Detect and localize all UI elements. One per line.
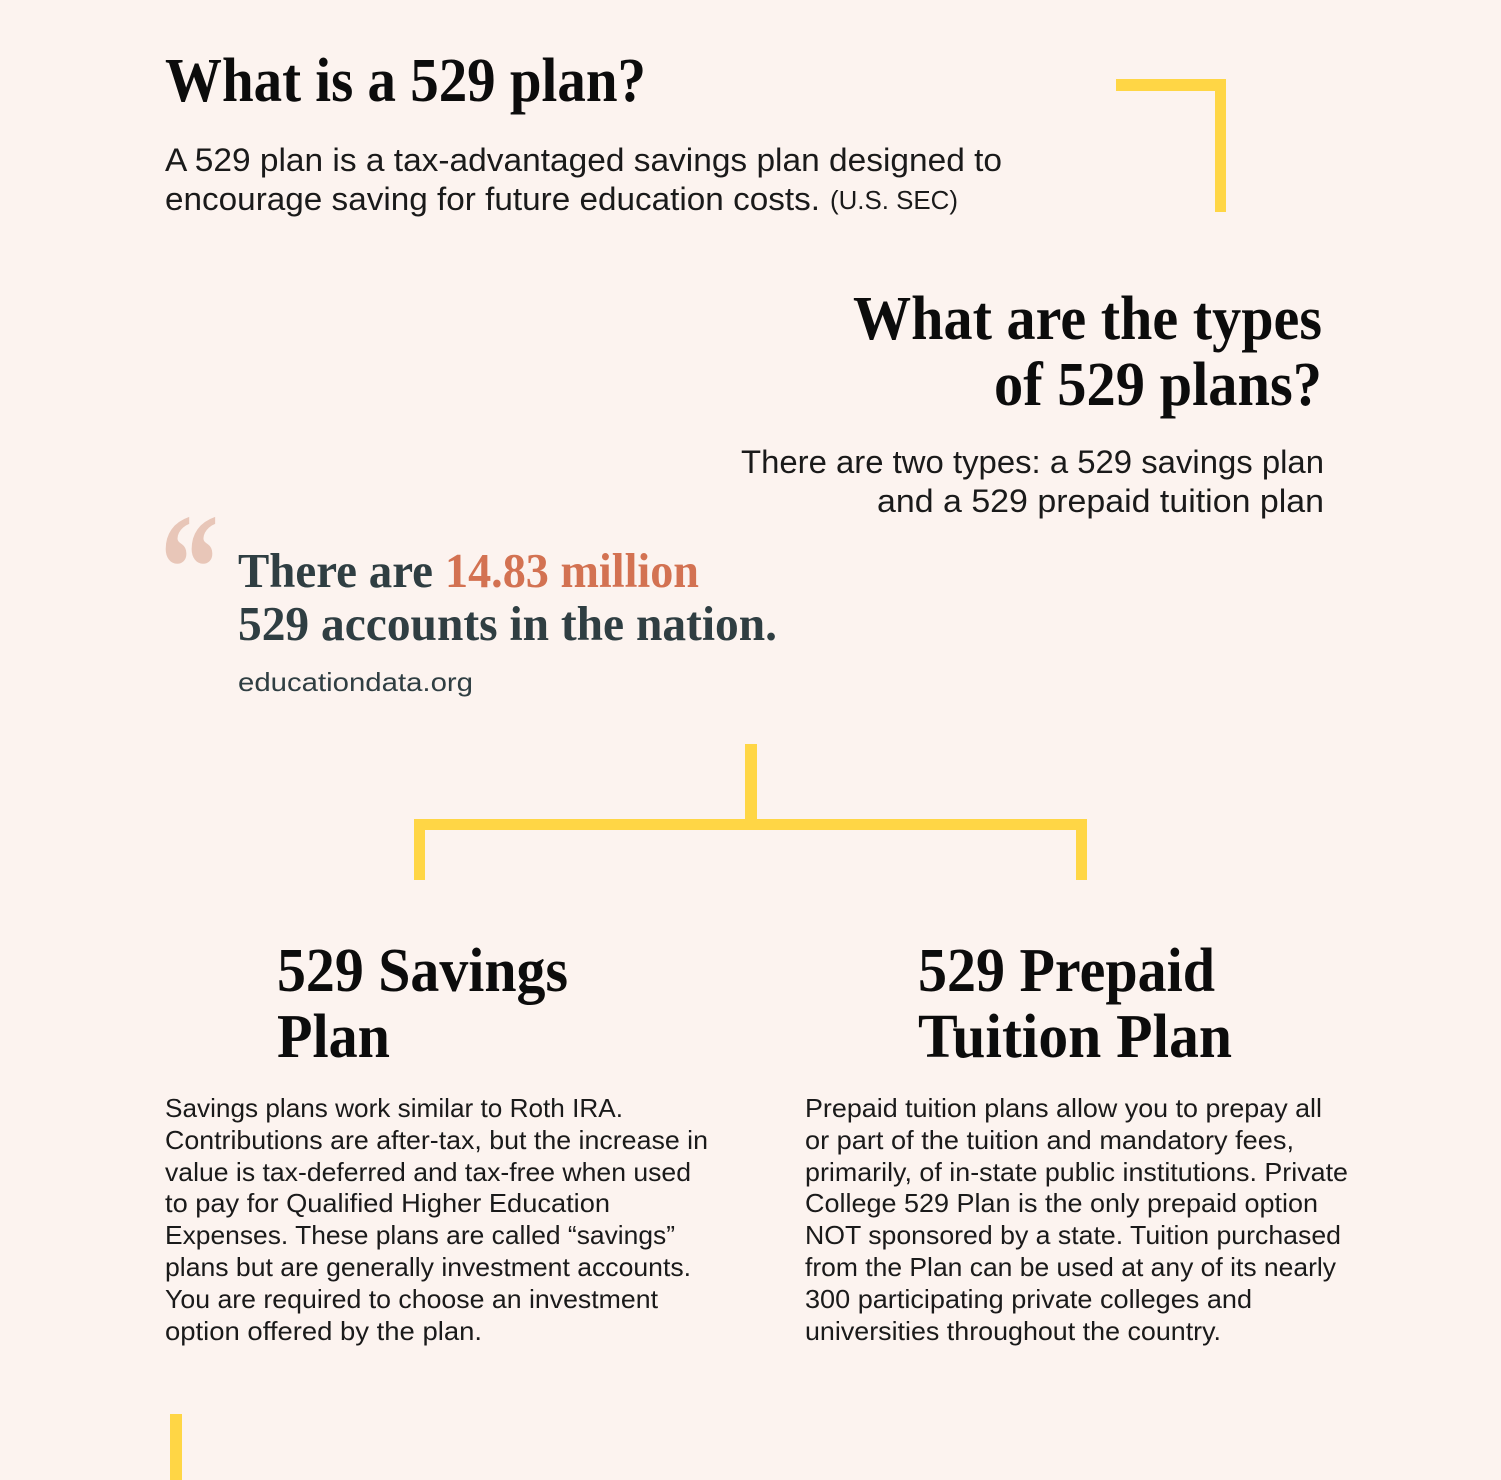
heading: 529 savings plan: Plan [277,1003,390,1071]
text block: savings plan description: to pay for Qualified Higher Education [165,1188,610,1218]
heading: types of 529 plans: What are the types [853,285,1322,353]
heading: types of 529 plans [853,285,1322,419]
text block: definition [165,142,1002,217]
title: what is a 529 plan: What is a 529 plan? [165,47,646,115]
text block: prepaid plan description: 300 participating private colleges and [805,1284,1252,1314]
text block: prepaid plan description: from the Plan can be used at any of its nearly [805,1252,1336,1282]
text block: two types: There are two types: a 529 savings plan [741,444,1324,480]
panel: savings plan [165,937,708,1346]
text block: definition: encourage saving for future education costs. [165,181,820,217]
text block: savings plan description: value is tax-deferred and tax-free when used [165,1157,691,1187]
text block: prepaid plan description: primarily, of in-state public institutions. Private [805,1157,1348,1187]
text block: definition: (U.S. SEC) [830,185,958,215]
text block: prepaid plan description: Prepaid tuition plans allow you to prepay all [805,1093,1322,1123]
bottom connector bar [170,1414,182,1480]
text block: prepaid plan description: College 529 Plan is the only prepaid option [805,1188,1318,1218]
text block: savings plan description: plans but are generally investment accounts. [165,1252,691,1282]
source: educationdata.org: educationdata.org [238,667,473,697]
callout: 14.83 million accounts [238,543,777,651]
text block: prepaid plan description: or part of the tuition and mandatory fees, [805,1125,1294,1155]
heading: 529 prepaid tuition plan: Tuition Plan [918,1003,1232,1071]
text block: definition: A 529 plan is a tax-advantaged savings plan designed to [165,142,1002,178]
heading: 529 savings plan: 529 Savings [277,937,568,1005]
callout: 14.83 million accounts: 529 accounts in the nation. [238,596,777,651]
text block: two types [741,444,1324,519]
heading: 529 savings plan [277,937,568,1071]
icon: quote mark: “ [160,482,219,654]
callout: 14.83 million accounts: 14.83 million [445,543,699,598]
text block: two types: and a 529 prepaid tuition plan [877,483,1324,519]
connector bracket [414,744,1087,880]
text block: savings plan description: Savings plans work similar to Roth IRA. [165,1093,623,1123]
text block: prepaid plan description: NOT sponsored by a state. Tuition purchased [805,1220,1341,1250]
text block: prepaid plan description: universities throughout the country. [805,1316,1221,1346]
heading: types of 529 plans: of 529 plans? [994,351,1322,419]
text block: savings plan description: option offered by the plan. [165,1316,482,1346]
text block: savings plan description: Expenses. These plans are called “savings” [165,1220,675,1250]
callout: 14.83 million accounts: There are [238,543,433,598]
panel: prepaid tuition plan [805,937,1348,1346]
heading: 529 prepaid tuition plan: 529 Prepaid [918,937,1215,1005]
text block: prepaid plan description [805,1093,1348,1346]
text block: savings plan description: Contributions are after-tax, but the increase in [165,1125,708,1155]
text block: savings plan description [165,1093,708,1346]
text block: savings plan description: You are required to choose an investment [165,1284,659,1314]
heading: 529 prepaid tuition plan [918,937,1232,1071]
corner bracket top right [1116,79,1226,212]
